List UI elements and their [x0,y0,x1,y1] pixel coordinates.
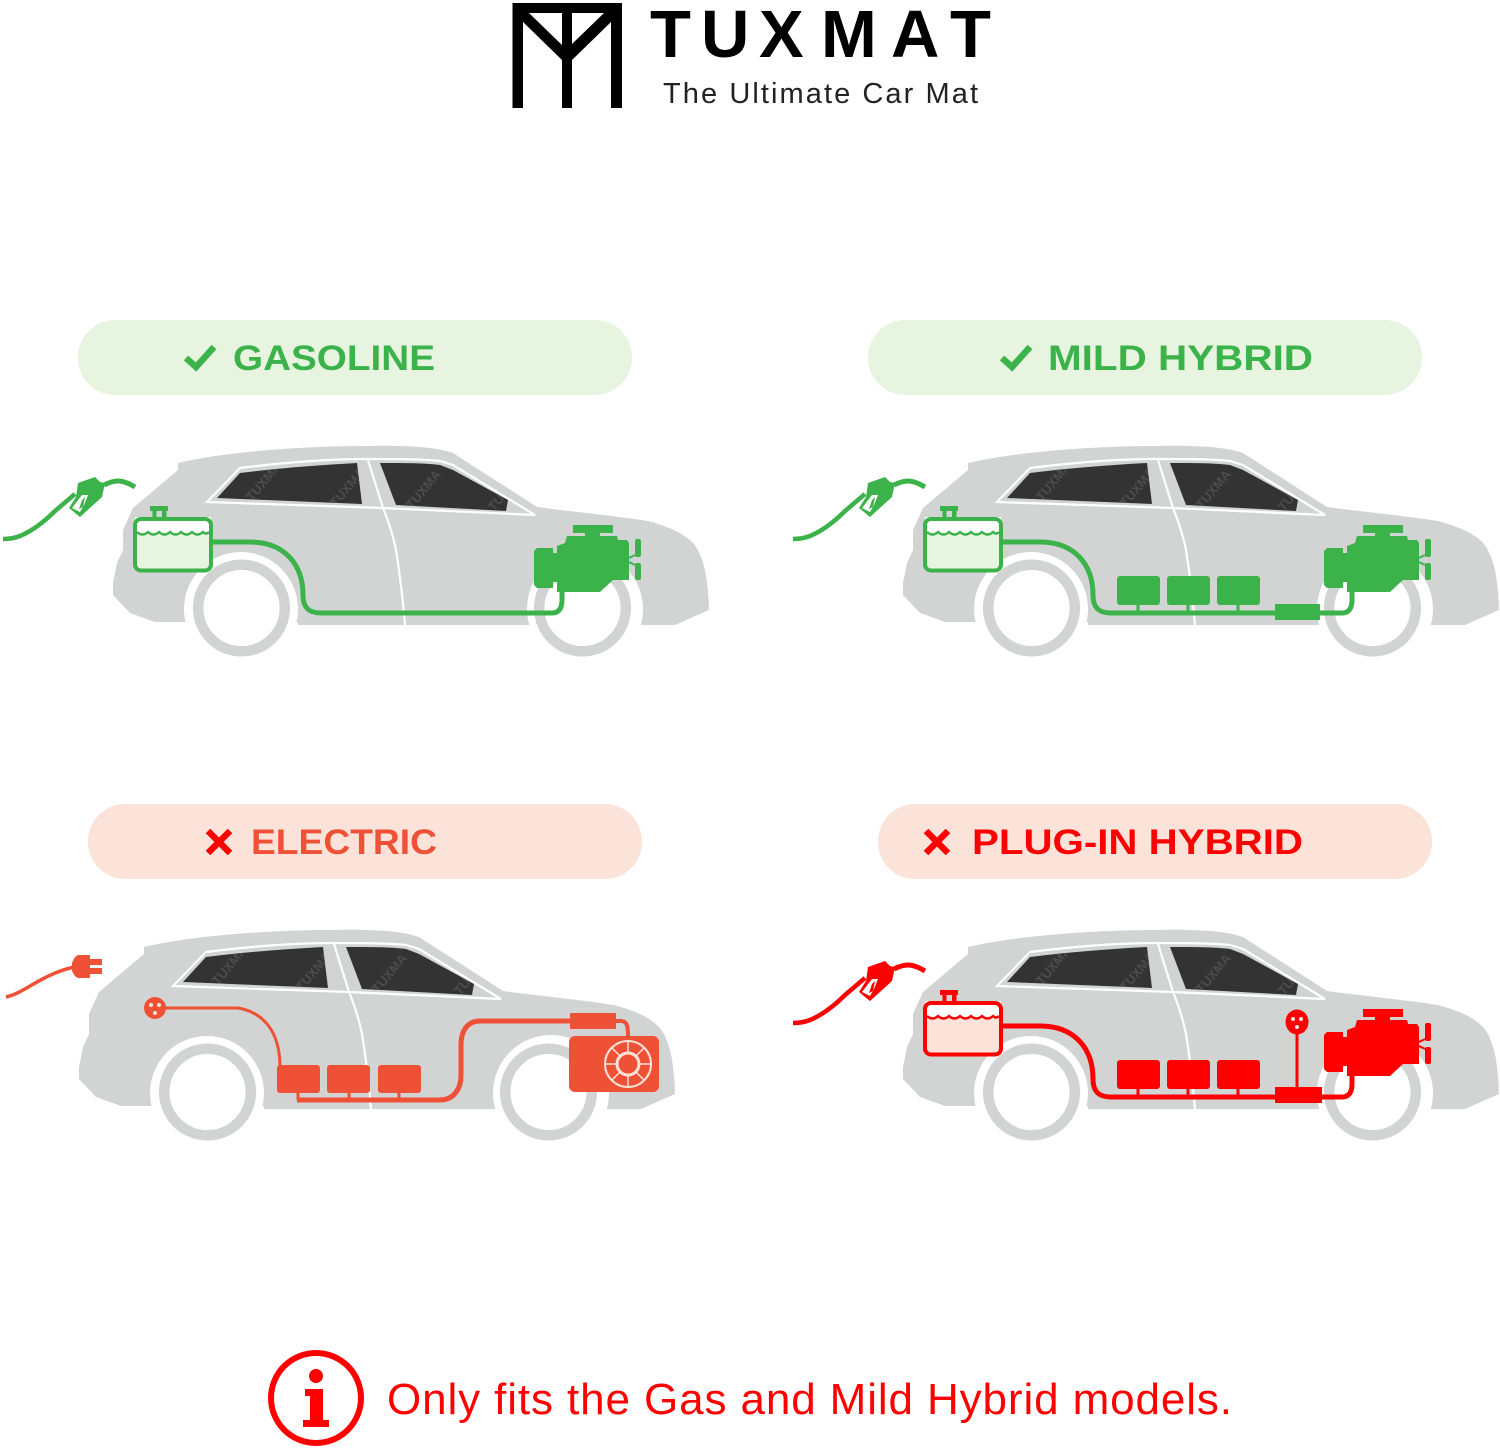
logo [512,0,991,110]
badge: gasoline: GASOLINE [233,339,435,378]
badge: electric: ELECTRIC [251,823,437,862]
footer note [271,1353,1232,1443]
panel: plug-in hybrid [793,804,1500,1151]
panel: electric [6,804,675,1151]
icon: TUXMAT monogram [512,3,622,108]
note text: Only fits the Gas and Mild Hybrid models. [387,1375,1232,1424]
car diagram: plug-in hybrid [793,930,1500,1151]
badge: mild hybrid: MILD HYBRID [1048,339,1313,378]
badge: plug-in hybrid [878,804,1432,879]
car diagram: electric [6,930,675,1151]
badge: gasoline [78,320,632,395]
car diagram: gasoline [3,446,709,667]
badge: mild hybrid [868,320,1422,395]
panel: mild hybrid [793,320,1499,667]
badge: electric [88,804,642,879]
panel: gasoline [3,320,709,667]
icon: info [271,1353,361,1443]
car diagram: mild hybrid [793,446,1499,667]
badge: plug-in hybrid: PLUG-IN HYBRID [972,823,1303,862]
tagline: The Ultimate Car Mat [663,78,978,110]
